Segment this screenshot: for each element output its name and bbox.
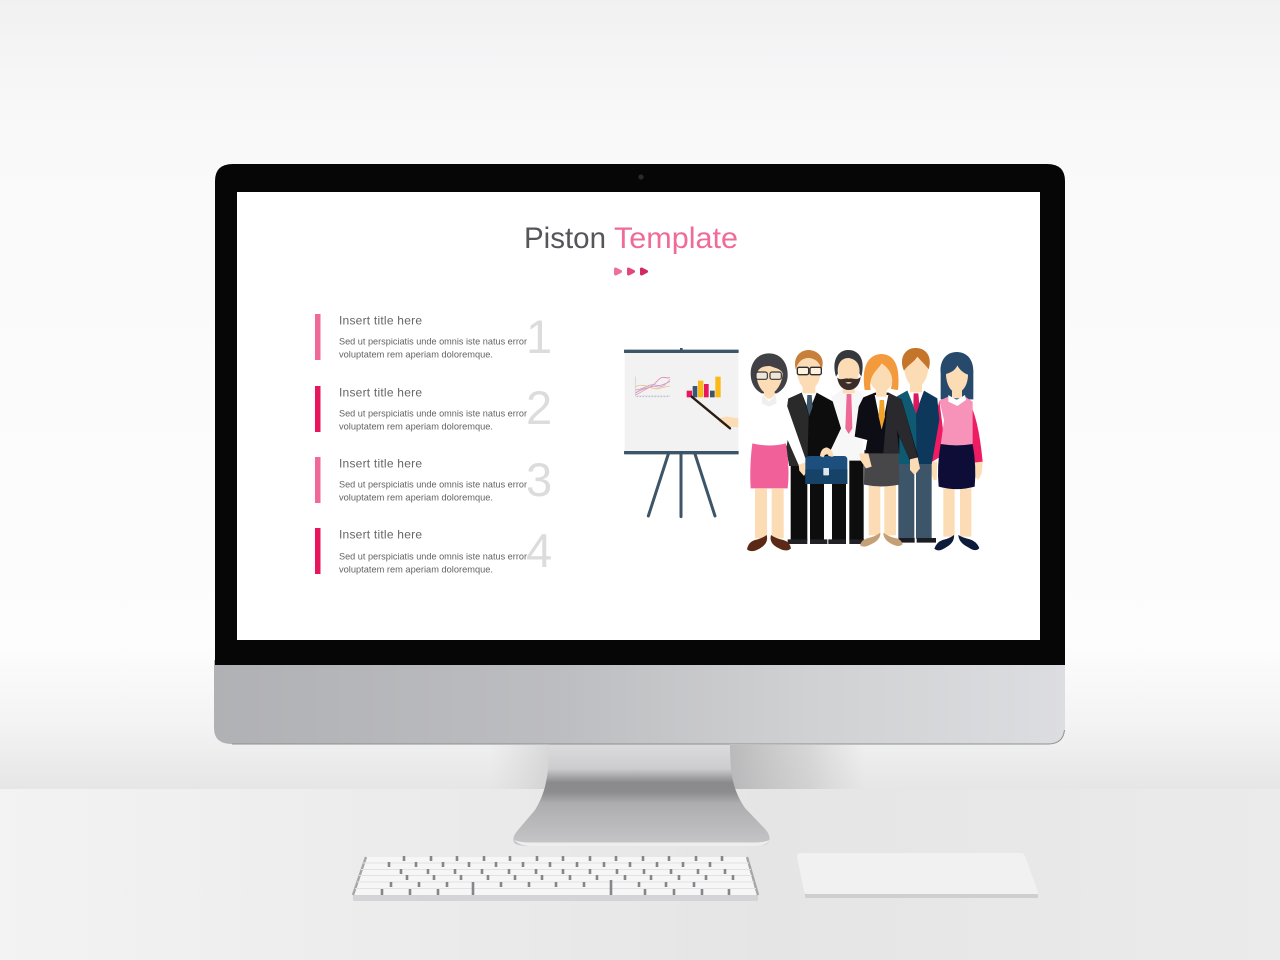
item 4 body: Sed ut perspiciatis unde omnis iste natus error: [339, 552, 527, 562]
bar chart on board: [687, 377, 721, 397]
list item 1: [315, 310, 552, 363]
accent bar 4: [315, 528, 320, 574]
title: Template: [614, 222, 738, 255]
item 3 body: Sed ut perspiciatis unde omnis iste natus error: [339, 480, 527, 490]
briefcase: [805, 447, 847, 484]
person: woman with glasses: [738, 353, 809, 551]
webcam: [638, 174, 644, 180]
shadow right of stand: [730, 745, 865, 789]
item 1 title: Insert title here: [339, 314, 422, 328]
desk surface: [0, 789, 1280, 960]
item 3 title: Insert title here: [339, 456, 422, 470]
list item 2: [315, 381, 552, 434]
flip chart easel: [624, 348, 739, 517]
item 1 body: [339, 336, 527, 360]
person: woman with long hair: [931, 352, 983, 550]
item 4 body: voluptatem rem aperiam doloremque.: [339, 564, 493, 576]
number 1: 1: [526, 310, 552, 363]
item 1 body: Sed ut perspiciatis unde omnis iste natus error: [339, 336, 527, 348]
monitor stand: [513, 744, 770, 846]
person: woman with orange hair: [855, 354, 920, 547]
item 2 body: [339, 408, 527, 432]
item 3 body: voluptatem rem aperiam doloremque.: [339, 492, 493, 504]
hand and pointer: [692, 397, 739, 428]
key gaps: [382, 856, 733, 895]
title: Piston: [524, 222, 606, 255]
person: man with navy suit: [895, 348, 939, 543]
shadow left of stand: [490, 745, 550, 789]
number 4: 4: [526, 524, 552, 577]
number 2: 2: [526, 381, 552, 434]
item 1 body: voluptatem rem aperiam doloremque.: [339, 350, 493, 360]
number 3: 3: [526, 453, 552, 506]
keyboard: [353, 856, 758, 901]
accent bar 2: [315, 386, 320, 432]
accent bar 1: [315, 314, 320, 360]
list item 4: [315, 524, 552, 577]
item 2 body: voluptatem rem aperiam doloremque.: [339, 422, 493, 432]
item 4 title: Insert title here: [339, 528, 422, 542]
item 3 body: [339, 480, 527, 504]
item 4 body: [339, 552, 527, 576]
item 2 body: Sed ut perspiciatis unde omnis iste natus error: [339, 408, 527, 420]
line chart on board: [635, 377, 670, 397]
title marker: three arrows: [616, 269, 646, 274]
illustration: presentation and team: [624, 348, 983, 551]
accent bar 3: [315, 457, 320, 503]
trackpad: [797, 853, 1038, 898]
person: man with glasses: [783, 350, 841, 544]
item 2 title: Insert title here: [339, 386, 422, 400]
monitor bezel: [215, 164, 1065, 665]
list item 3: [315, 453, 552, 506]
person: bearded man: [828, 350, 865, 544]
monitor: [214, 164, 1065, 846]
title: [524, 222, 738, 255]
screen: [237, 192, 1040, 640]
monitor chin: [214, 660, 1065, 744]
